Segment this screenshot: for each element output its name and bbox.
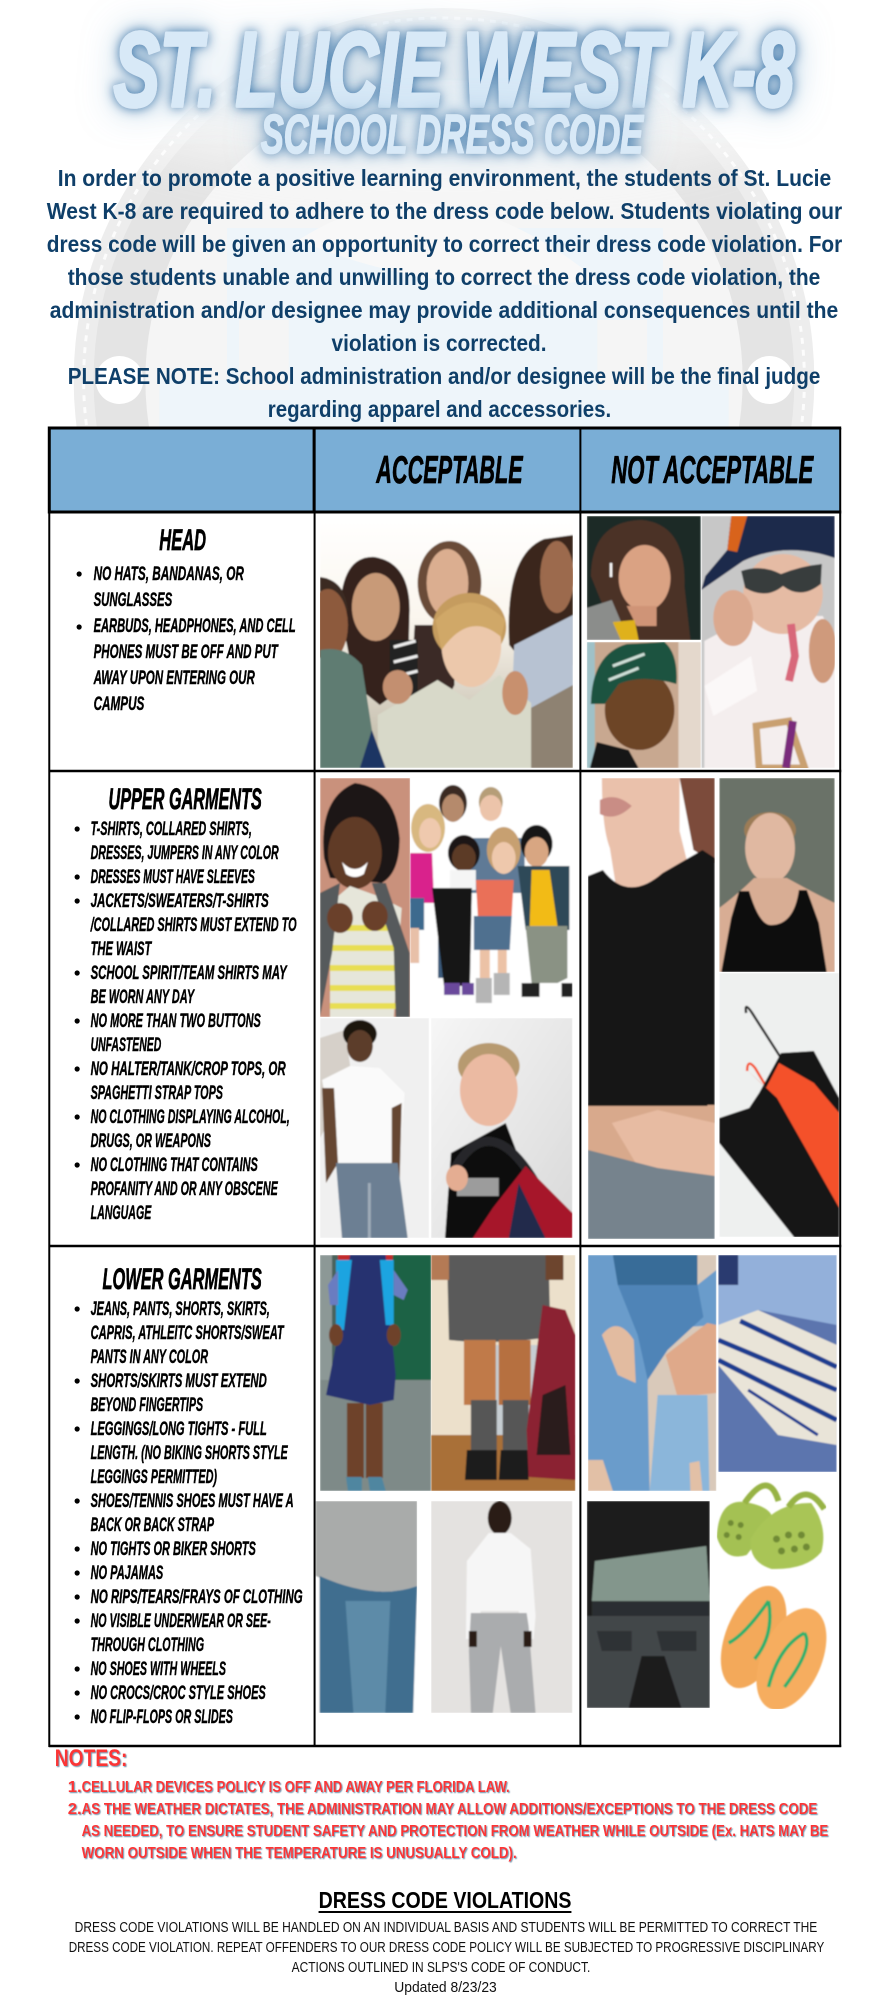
heading: head: HEAD xyxy=(159,524,206,557)
row: upper garments rules: SCHOOL SPIRIT/TEAM SHIRTS MAY xyxy=(91,963,288,984)
intro paragraph: In order to promote a positive learning environment, the students of St. Lucie xyxy=(58,165,831,191)
notes section: CELLULAR DEVICES POLICY IS OFF AND AWAY PER FLORIDA LAW. xyxy=(82,1779,510,1796)
row: upper garments rules: THE WAIST xyxy=(91,939,152,960)
row: lower garments rules: NO SHOES WITH WHEELS xyxy=(91,1659,226,1680)
photo: girl in navy school dress xyxy=(320,1255,431,1491)
row: upper garments rules: PROFANITY AND OR ANY OBSCENE xyxy=(91,1179,279,1200)
row: head rules: AWAY UPON ENTERING OUR xyxy=(93,668,255,689)
photo: frayed denim close-up xyxy=(718,1255,837,1472)
heading: notes: NOTES: xyxy=(55,1745,127,1772)
row: upper garments rules: DRESSES MUST HAVE SLEEVES xyxy=(91,867,255,888)
row: lower garments rules: LENGTH. (NO BIKING SHORTS STYLE xyxy=(91,1443,288,1464)
header: acceptable: ACCEPTABLE xyxy=(376,449,523,492)
row: head rules: SUNGLASSES xyxy=(94,590,172,611)
row: lower garments rules: LEGGINGS PERMITTED) xyxy=(91,1467,217,1488)
photo: ripped jeans xyxy=(588,1255,716,1491)
row: lower garments rules: THROUGH CLOTHING xyxy=(91,1635,204,1656)
photo: grey pleated skirt with backpack xyxy=(431,1255,576,1491)
notes section: WORN OUTSIDE WHEN THE TEMPERATURE IS UNUSUALLY COLD). xyxy=(82,1845,517,1862)
row: upper garments rules: UNFASTENED xyxy=(91,1035,161,1056)
row: upper garments rules: DRUGS, OR WEAPONS xyxy=(91,1131,211,1152)
photo: girl with earbud xyxy=(586,516,701,640)
row: lower garments rules: NO RIPS/TEARS/FRAYS OF CLOTHING xyxy=(91,1587,303,1608)
row: upper garments rules xyxy=(75,783,297,1224)
row: head rules: CAMPUS xyxy=(94,694,145,715)
row: lower garments rules: NO FLIP-FLOPS OR SLIDES xyxy=(91,1707,233,1728)
row: lower garments rules: NO TIGHTS OR BIKER SHORTS xyxy=(91,1539,256,1560)
table header row xyxy=(49,428,840,512)
intro paragraph: violation is corrected. xyxy=(332,330,547,356)
notes section xyxy=(55,1745,829,1862)
photo: boy with red backpack xyxy=(431,1018,572,1238)
row: upper garments rules: T-SHIRTS, COLLARED SHIRTS, xyxy=(91,819,252,840)
photo: spaghetti strap top xyxy=(719,973,840,1237)
row: head rules: EARBUDS, HEADPHONES, AND CELL xyxy=(94,616,296,637)
row: head rules xyxy=(77,524,296,715)
row: lower garments rules: NO VISIBLE UNDERWEAR OR SEE- xyxy=(91,1611,271,1632)
heading: lower garments: LOWER GARMENTS xyxy=(103,1263,262,1296)
notes section: 1. xyxy=(68,1779,82,1796)
intro paragraph: administration and/or designee may provide additional consequences until the xyxy=(50,297,838,323)
intro paragraph: regarding apparel and accessories. xyxy=(268,396,611,422)
row: lower garments rules: NO PAJAMAS xyxy=(91,1563,163,1584)
intro paragraph: PLEASE NOTE: School administration and/or designee will be the final judge xyxy=(68,363,820,389)
row: upper garments rules: NO CLOTHING THAT CONTAINS xyxy=(91,1155,258,1176)
photo: sagging jeans showing underwear xyxy=(586,1501,710,1708)
heading: dress code violations: DRESS CODE VIOLATIONS xyxy=(319,1887,571,1913)
row: lower garments rules: BEYOND FINGERTIPS xyxy=(91,1395,203,1416)
row: upper garments rules: NO MORE THAN TWO BUTTONS xyxy=(91,1011,261,1032)
intro paragraph: those students unable and unwilling to correct the dress code violation, the xyxy=(68,264,820,290)
row: lower garments rules: SHOES/TENNIS SHOES MUST HAVE A xyxy=(91,1491,294,1512)
intro paragraph xyxy=(47,165,842,422)
photo: group of students with backpacks xyxy=(410,784,572,1004)
photo: child with green bandana xyxy=(586,642,701,768)
photo: young man in white t-shirt and jeans xyxy=(320,1018,429,1238)
photo: woman in black crop top xyxy=(588,778,715,1239)
icon: green crocs xyxy=(716,1482,826,1570)
intro paragraph: West K-8 are required to adhere to the dress code below. Students violating our xyxy=(47,198,842,224)
photo: man in black tank top xyxy=(719,778,835,972)
row: lower garments rules: NO CROCS/CROC STYLE SHOES xyxy=(91,1683,266,1704)
update date: Updated 8/23/23 xyxy=(394,1979,497,1996)
row: head rules: NO HATS, BANDANAS, OR xyxy=(94,564,244,585)
row: lower garments rules: CAPRIS, ATHLEITC SHORTS/SWEAT xyxy=(91,1323,285,1344)
heading: upper garments: UPPER GARMENTS xyxy=(109,783,262,816)
violations paragraph xyxy=(69,1919,824,1996)
photo: smiling girl in striped shirt xyxy=(320,778,410,1017)
row: upper garments rules: JACKETS/SWEATERS/T-SHIRTS xyxy=(91,891,269,912)
photo: boy with cap, sunglasses and necklaces xyxy=(701,516,835,768)
photo: group of smiling kids xyxy=(320,534,573,768)
row: upper garments rules: /COLLARED SHIRTS MUST EXTEND TO xyxy=(90,915,297,936)
row: head rules: PHONES MUST BE OFF AND PUT xyxy=(94,642,279,663)
icon: orange flip-flops xyxy=(720,1585,828,1709)
row: upper garments rules: DRESSES, JUMPERS IN ANY COLOR xyxy=(91,843,279,864)
row: lower garments rules: JEANS, PANTS, SHORTS, SKIRTS, xyxy=(91,1299,270,1320)
row: lower garments rules: SHORTS/SKIRTS MUST EXTEND xyxy=(91,1371,267,1392)
row: lower garments rules: LEGGINGS/LONG TIGHTS - FULL xyxy=(91,1419,267,1440)
photo: baggy jeans and checked shirt xyxy=(316,1501,418,1713)
row: upper garments rules: BE WORN ANY DAY xyxy=(91,987,195,1008)
notes section: 2. xyxy=(68,1801,82,1818)
row: lower garments rules xyxy=(75,1263,303,1728)
photo: young man in grey sweatpants xyxy=(431,1501,572,1713)
row: upper garments rules: NO CLOTHING DISPLAYING ALCOHOL, xyxy=(91,1107,290,1128)
row: lower garments rules: PANTS IN ANY COLOR xyxy=(91,1347,208,1368)
row: upper garments rules: LANGUAGE xyxy=(91,1203,152,1224)
violations paragraph: ACTIONS OUTLINED IN SLPS'S CODE OF CONDUCT. xyxy=(292,1959,590,1976)
row: upper garments rules: NO HALTER/TANK/CROP TOPS, OR xyxy=(91,1059,286,1080)
row: lower garments rules: BACK OR BACK STRAP xyxy=(91,1515,214,1536)
dress code table xyxy=(49,428,841,1747)
table grid lines xyxy=(49,428,841,1747)
title block xyxy=(76,0,812,170)
watermark: school logo xyxy=(74,8,814,752)
row: upper garments rules: SPAGHETTI STRAP TOPS xyxy=(91,1083,223,1104)
subtitle: School Dress Code: SCHOOL DRESS CODE xyxy=(261,103,644,165)
